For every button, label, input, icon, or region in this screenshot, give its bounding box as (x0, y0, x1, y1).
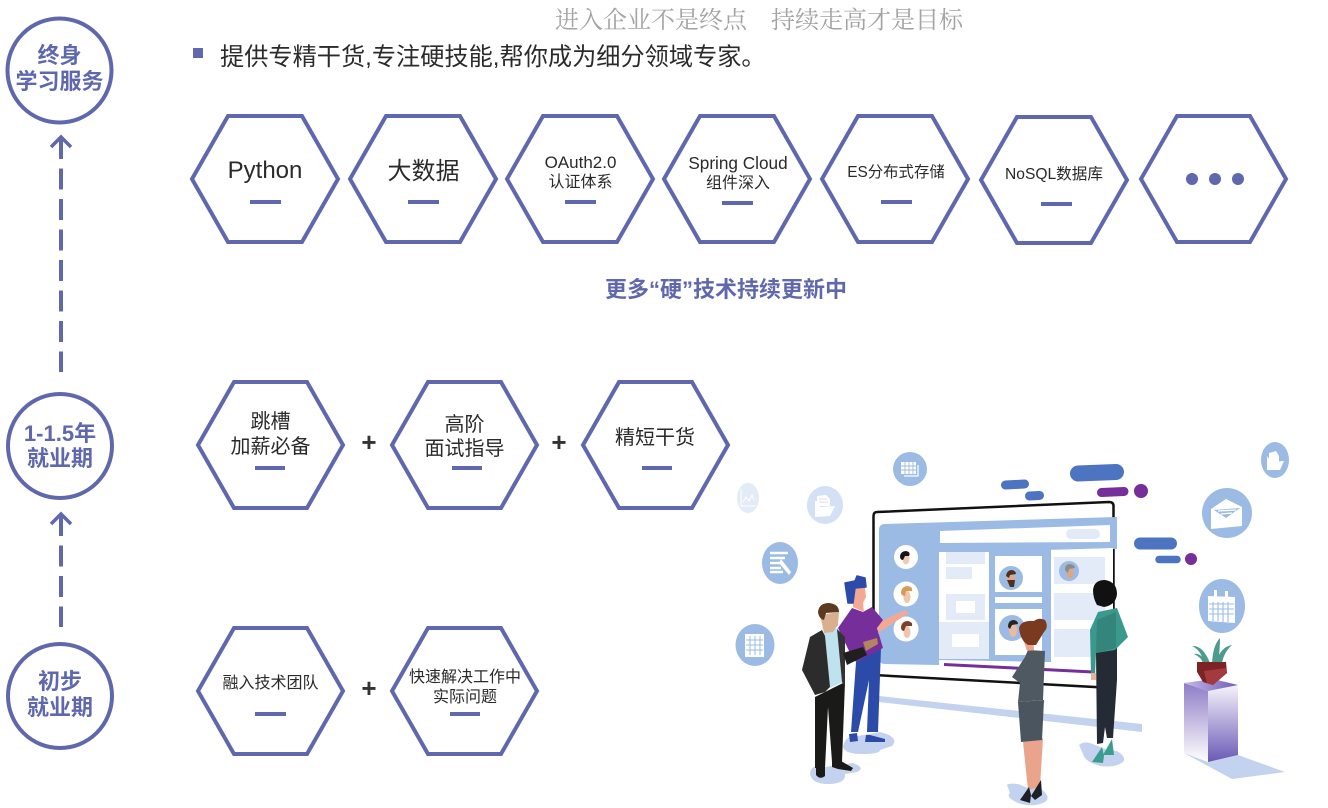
hexagon: job hopping: 跳槽 (250, 410, 290, 433)
stage circle: 1-1.5 years: 就业期 (27, 446, 93, 471)
stage circle: lifelong learning: 学习服务 (15, 69, 104, 94)
person: man in black jacket (802, 603, 878, 784)
hexagon: Python: Python (228, 157, 302, 184)
hexagon: big data (350, 116, 496, 242)
plus sign: + (361, 673, 377, 703)
hexagon: big data: 大数据 (388, 158, 460, 185)
stage circle: early career: 就业期 (27, 695, 93, 720)
hexagon: Spring Cloud: 组件深入 (706, 174, 770, 192)
stage circle: lifelong learning (8, 18, 112, 122)
hexagon: advanced interview: 面试指导 (424, 437, 504, 460)
hexagon: advanced interview: 高阶 (444, 413, 484, 436)
plus sign: + (551, 427, 567, 457)
hexagon: job hopping (198, 382, 343, 508)
illustration: team at dashboard (736, 442, 1289, 805)
hexagon: concise content: 精短干货 (615, 426, 695, 449)
hexagon: NoSQL database: NoSQL数据库 (1005, 165, 1103, 183)
hexagon: solve work problems (392, 628, 537, 754)
section heading with bullet: 提供专精干货,专注硬技能,帮你成为细分领域专家。 (220, 44, 766, 71)
hexagon: OAuth2.0: 认证体系 (548, 173, 613, 191)
stage circle: lifelong learning: 终身 (37, 43, 82, 68)
person: woman in grey suit (1007, 619, 1048, 805)
stage circle: 1-1.5 years (8, 394, 112, 498)
top title: 进入企业不是终点 持续走高才是目标 (555, 7, 964, 34)
floating bubble: notes (762, 542, 798, 584)
avatars (894, 545, 918, 569)
hexagon: NoSQL database (981, 117, 1127, 243)
hexagon: solve work problems: 实际问题 (433, 688, 497, 706)
hexagon: job hopping: 加薪必备 (230, 435, 310, 458)
stage circle: early career: 初步 (38, 669, 82, 694)
floating bubble: folder (807, 486, 843, 524)
hexagon: Python (192, 116, 338, 242)
hexagon: join tech team (198, 628, 343, 754)
person: woman in teal top (1079, 580, 1128, 766)
hexagon: OAuth2.0: OAuth2.0 (545, 153, 616, 172)
hexagon: join tech team: 融入技术团队 (222, 674, 319, 692)
screen (874, 502, 1117, 688)
hexagon: Spring Cloud (664, 116, 810, 242)
plus sign: + (361, 427, 377, 457)
floating pills and dots (1006, 472, 1197, 565)
hexagon: solve work problems: 快速解决工作中 (409, 668, 521, 686)
floor band (879, 696, 1142, 732)
floating bubble: mail (1202, 488, 1252, 538)
stage circle: early career (8, 644, 112, 748)
hexagon: OAuth2.0 (507, 116, 653, 242)
hexagon: advanced interview (392, 382, 537, 508)
floating bubble: calculator grid (736, 624, 774, 666)
floating bubble: file (1261, 442, 1289, 478)
stage circle: 1-1.5 years: 1-1.5年 (24, 421, 96, 446)
hexagon: Spring Cloud: Spring Cloud (688, 153, 788, 173)
caption: more hard skills: 更多“硬”技术持续更新中 (605, 277, 847, 302)
floating bubble: chart (737, 483, 759, 513)
person: man in purple shirt (838, 576, 909, 754)
dashed arrow: lower (51, 514, 71, 627)
floating bubble: calendar (1199, 579, 1245, 633)
pedestal and plant (1184, 638, 1285, 779)
hexagon: ES distributed storage (822, 116, 968, 242)
hexagon: concise content (583, 382, 728, 508)
dashed arrow: upper (51, 137, 71, 372)
hexagon: more (1141, 116, 1286, 242)
floating bubble: table (893, 452, 927, 486)
hexagon: ES distributed storage: ES分布式存储 (847, 163, 945, 181)
